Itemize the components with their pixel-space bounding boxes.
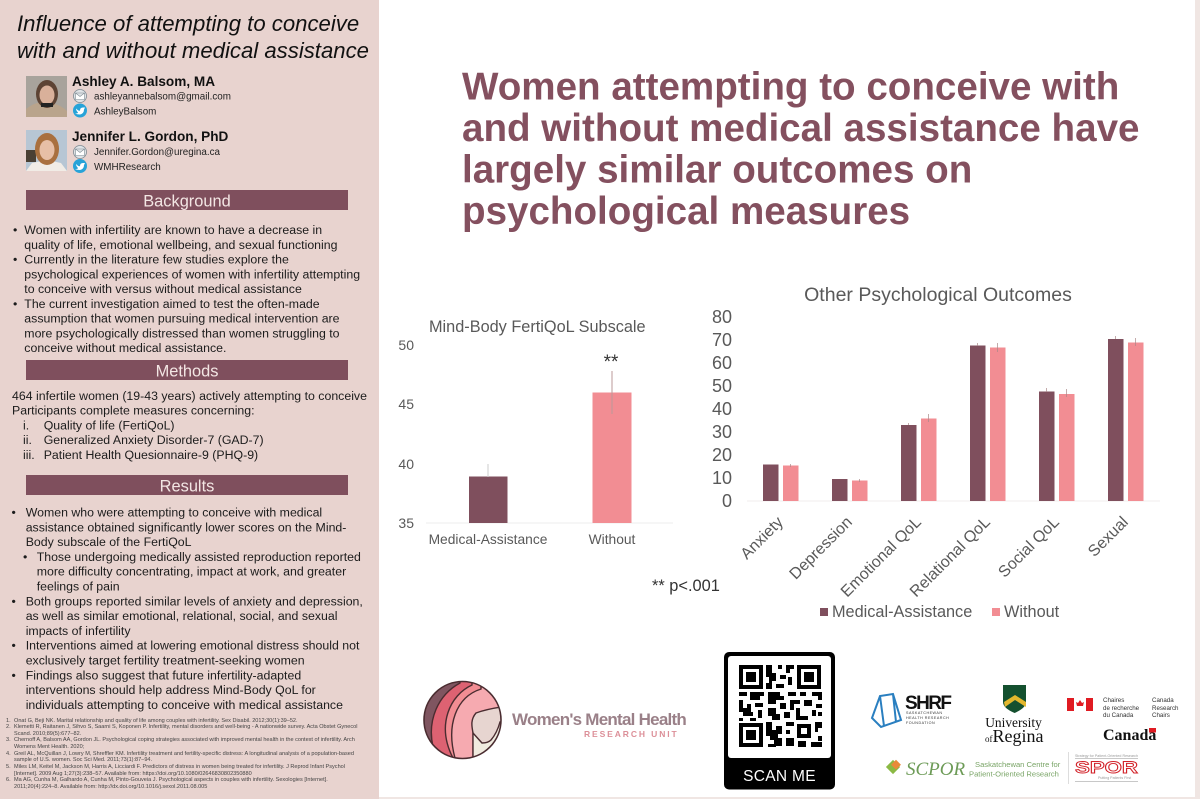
chart: Other Psychological Outcomes: Relational QoL [907, 514, 994, 601]
references: Womens Ment Health. 2020; [14, 744, 85, 750]
heading: Background [26, 190, 348, 210]
text block: background bullets: conceive without medical assistance. [24, 341, 226, 355]
text block: methods: iii. [23, 448, 35, 462]
chart: Mind-Body FertiQoL: 35 [398, 515, 414, 531]
text block: methods: 464 infertile women (19-43 years) actively attempting to conceive [12, 389, 367, 403]
heading: Background: Background [143, 192, 231, 210]
author: Ashley Balsom: ashleyannebalsom@gmail.com [94, 92, 231, 102]
heading: Methods [26, 360, 348, 380]
text block: results bullets: Women who were attempting to conceive with medical [26, 506, 322, 520]
author: Jennifer Gordon: Jennifer L. Gordon, PhD [72, 129, 229, 144]
logo: SCPOR: Patient-Oriented Research [969, 770, 1059, 778]
chart: Other Psychological Outcomes [712, 284, 1160, 621]
chart: Other Psychological Outcomes: Depression [787, 514, 856, 583]
author: Ashley Balsom: Ashley A. Balsom, MA [72, 74, 215, 89]
text block: results bullets: • [12, 639, 16, 653]
references: Scand. 2010;89(5):677–82. [14, 731, 82, 737]
references: 6. [6, 777, 11, 783]
bar: Without [592, 392, 632, 523]
author: Ashley Balsom [26, 74, 231, 118]
chart: Other Psychological Outcomes: Other Psychological Outcomes [804, 284, 1072, 306]
logo: Canada Research Chairs [1067, 697, 1179, 744]
logo: SHRF [872, 693, 951, 727]
logo: Women's Mental Health Research Unit: Women's Mental Health [512, 710, 686, 729]
logo: Women's Mental Health Research Unit: RESEARCH UNIT [584, 729, 679, 739]
references: 2011;20(4):224–8. Available from: http://dx.doi.org/10.1016/j.sexol.2011.08.005 [14, 784, 207, 790]
icon: twitter [73, 159, 87, 173]
author: Jennifer Gordon: WMHResearch [94, 162, 161, 173]
logo: SCPOR: Saskatchewan Centre for [975, 760, 1061, 769]
author: Jennifer Gordon [26, 129, 229, 173]
references: 5. [6, 764, 11, 770]
text block: results bullets: more difficulty concentrating, impact at work, and greater [37, 565, 346, 579]
text block: results bullets: Those undergoing medically assisted reproduction reported [37, 550, 361, 564]
logo: Canada Research Chairs: Chaires [1103, 697, 1124, 704]
logo: Canada Research Chairs: Chairs [1152, 712, 1170, 719]
text block: results bullets: assistance obtained significantly lower scores on the Mind- [26, 520, 346, 534]
logo: University of Regina [985, 685, 1044, 746]
references: Greil AL, McQuillan J, Lowry M, Shreffler KM. Infertility treatment and fertility-specific distress: A longitudinal analysis of a population-based [14, 751, 354, 757]
chart: Mind-Body FertiQoL: Mind-Body FertiQoL Subscale [429, 318, 646, 336]
text block: results bullets: Interventions aimed at lowering emotional distress should not [26, 639, 360, 653]
chart: Other Psychological Outcomes: 40 [712, 399, 732, 419]
text block: background bullets: quality of life, emotional wellbeing, and sexual functioning [24, 238, 338, 252]
legend: Medical-Assistance [832, 603, 972, 621]
chart: Other Psychological Outcomes: 20 [712, 445, 732, 465]
text block: background bullets: • [13, 252, 17, 266]
text block: background bullets: • [13, 297, 17, 311]
text block: background bullets: to conceive with versus without medical assistance [24, 282, 302, 296]
chart: Other Psychological Outcomes: 30 [712, 422, 732, 442]
logo: Canada Research Chairs: Canada [1103, 727, 1156, 744]
icon: email [74, 90, 86, 102]
text block: methods: Patient Health Quesionnaire-9 (PHQ-9) [44, 448, 258, 462]
references: Chernoff A, Balsom AA, Gordon JL. Psychological coping strategies associated with improved mental health in the context of infertility. Arch [14, 737, 355, 743]
chart: Mind-Body FertiQoL: Medical-Assistance [429, 532, 548, 547]
text block: results bullets: individuals attempting to conceive with medical assistance [26, 698, 343, 712]
text block: results bullets: interventions should help address Mind-Body QoL for [26, 683, 316, 697]
chart: Other Psychological Outcomes: 10 [712, 468, 732, 488]
logo: University of Regina: University [985, 715, 1042, 730]
text block: background bullets: assumption that women pursuing medical intervention are [24, 312, 340, 326]
references: Miles LM, Keitel M, Jackson M, Harris A, Licciardi F. Predictors of distress in women being treated for infertility. J Reprod Infant Psychol [14, 764, 345, 770]
logo: SHRF: SASKATCHEWAN [906, 711, 943, 715]
text block: results bullets: impacts of infertility [26, 624, 131, 638]
text block: methods: ii. [23, 433, 32, 447]
title: and without medical assistance have [462, 107, 1140, 150]
logo: SHRF: FOUNDATION [906, 721, 935, 725]
text block: results bullets: Body subscale of the FertiQoL [26, 535, 192, 549]
text block: results bullets: as well as similar emotional, relational, social, and sexual [26, 609, 337, 623]
logo: SPOR: Putting Patients First [1098, 776, 1131, 780]
logo: Canada Research Chairs: Canada [1152, 697, 1174, 704]
heading: Results [26, 475, 348, 496]
chart: Other Psychological Outcomes: Emotional QoL [838, 514, 925, 601]
QR code: scan me [724, 652, 835, 790]
chart: Mind-Body FertiQoL: 50 [398, 337, 414, 353]
author: Jennifer Gordon: Jennifer.Gordon@uregina.ca [94, 147, 221, 158]
chart: Mind-Body FertiQoL: Without [589, 532, 636, 547]
references: Onat G, Beji NK. Marital relationship and quality of life among couples with infertility. Sex Disabil. 2012;30(1):39–52. [14, 718, 298, 724]
text block: results bullets: exclusively target fertility treatment-seeking women [26, 654, 305, 668]
heading: Results: Results [160, 478, 214, 496]
text block: results bullets: • [23, 550, 27, 564]
legend: Without [1004, 603, 1060, 621]
logo: SPOR [1068, 752, 1138, 784]
chart: Mind-Body FertiQoL: 45 [398, 396, 414, 412]
logo: SPOR: SPOR [1075, 758, 1138, 777]
text block: background bullets: more psychologically distressed than women struggling to [24, 326, 340, 340]
chart: Other Psychological Outcomes: 60 [712, 353, 732, 373]
photo: Ashley [26, 76, 67, 117]
text block: background bullets: psychological experiences of women with infertility attempting [24, 267, 360, 281]
icon: twitter [73, 104, 87, 118]
text block: results bullets: • [12, 506, 16, 520]
chart: Other Psychological Outcomes: Anxiety [738, 514, 787, 563]
icon: email [74, 146, 86, 158]
chart: Other Psychological Outcomes: 70 [712, 330, 732, 350]
logo: SHRF: HEALTH RESEARCH [906, 716, 949, 720]
chart: Mind-Body FertiQoL: 40 [398, 456, 414, 472]
chart: Other Psychological Outcomes: Social QoL [995, 514, 1063, 581]
photo: Jennifer [26, 130, 67, 171]
logo: SPOR: Strategy for Patient-Oriented Research [1075, 754, 1138, 758]
text block: methods: Generalized Anxiety Disorder-7 (GAD-7) [44, 433, 264, 447]
references: 2. [6, 724, 11, 730]
text block: results bullets: Findings also suggest that future infertility-adapted [26, 668, 301, 682]
chart: Other Psychological Outcomes: 0 [722, 491, 732, 511]
text block: methods: Participants complete measures concerning: [12, 404, 255, 418]
significance note: ** p<.001 [652, 577, 720, 595]
text block: background bullets: Currently in the literature few studies explore the [24, 252, 289, 266]
chart: Mind-Body FertiQoL: ** [604, 352, 619, 373]
references: 4. [6, 751, 11, 757]
author: Ashley Balsom: AshleyBalsom [94, 106, 156, 118]
logo: SCPOR [886, 759, 1061, 780]
logo: Canada Research Chairs: du Canada [1103, 712, 1134, 719]
text block: results bullets: feelings of pain [37, 580, 120, 594]
title: Women attempting to conceive with [462, 66, 1119, 108]
text block: background bullets: Women with infertility are known to have a decrease in [24, 223, 322, 237]
chart: Other Psychological Outcomes: 50 [712, 376, 732, 396]
references: 1. [6, 718, 11, 724]
poster subtitle: Influence of attempting to conceive [17, 11, 359, 36]
logo: University of Regina: ofRegina [985, 726, 1044, 746]
QR code: scan me: SCAN ME [743, 768, 816, 785]
references: sample of U.S. women. Soc Sci Med. 2011;73(1):87–94. [14, 757, 152, 763]
text block: results bullets: • [12, 594, 16, 608]
heading: Methods: Methods [156, 362, 218, 380]
references: 3. [6, 737, 11, 743]
chart: Other Psychological Outcomes: 80 [712, 307, 732, 327]
references: [Internet]. 2009 Aug 1;27(3):238–57. Available from: https://doi.org/10.1080/02646830802350880 [14, 771, 252, 777]
logo: Canada Research Chairs: Research [1152, 705, 1179, 712]
panel: left sidebar [0, 0, 379, 799]
chart: Mind-Body FertiQoL [398, 318, 673, 547]
text block: methods: i. [23, 418, 29, 432]
text block: background bullets: The current investigation aimed to test the often-made [24, 297, 320, 311]
title: psychological measures [462, 190, 910, 233]
poster subtitle: with and without medical assistance [17, 38, 369, 63]
logo: Women's Mental Health Research Unit [423, 680, 686, 760]
text block: background bullets: • [13, 223, 17, 237]
text block: methods: Quality of life (FertiQoL) [44, 418, 175, 432]
references: Klemetti R, Raitanen J, Sihvo S, Saarni S, Koponen P. Infertility, mental disorders and well-being - A nationwide survey. Acta Obstet Gynecol [14, 724, 357, 730]
text block: results bullets: Both groups reported similar levels of anxiety and depression, [26, 594, 363, 608]
logo: SHRF: SHRF [905, 693, 951, 714]
bar: Medical-Assistance [469, 476, 508, 523]
chart: Other Psychological Outcomes: Sexual [1085, 514, 1132, 560]
legend [820, 603, 1060, 621]
text block: results bullets: • [12, 668, 16, 682]
icon: profile in circle [423, 680, 502, 760]
title: largely similar outcomes on [462, 148, 972, 192]
references: Ma AG, Cunha M, Galhardo A, Cunha M, Pinto-Gouveia J. Psychological aspects in couples with infertility. Sexologies [Internet]. [14, 777, 328, 783]
logo: Canada Research Chairs: de recherche [1103, 705, 1140, 712]
logo: SCPOR: SCPOR [906, 759, 966, 780]
